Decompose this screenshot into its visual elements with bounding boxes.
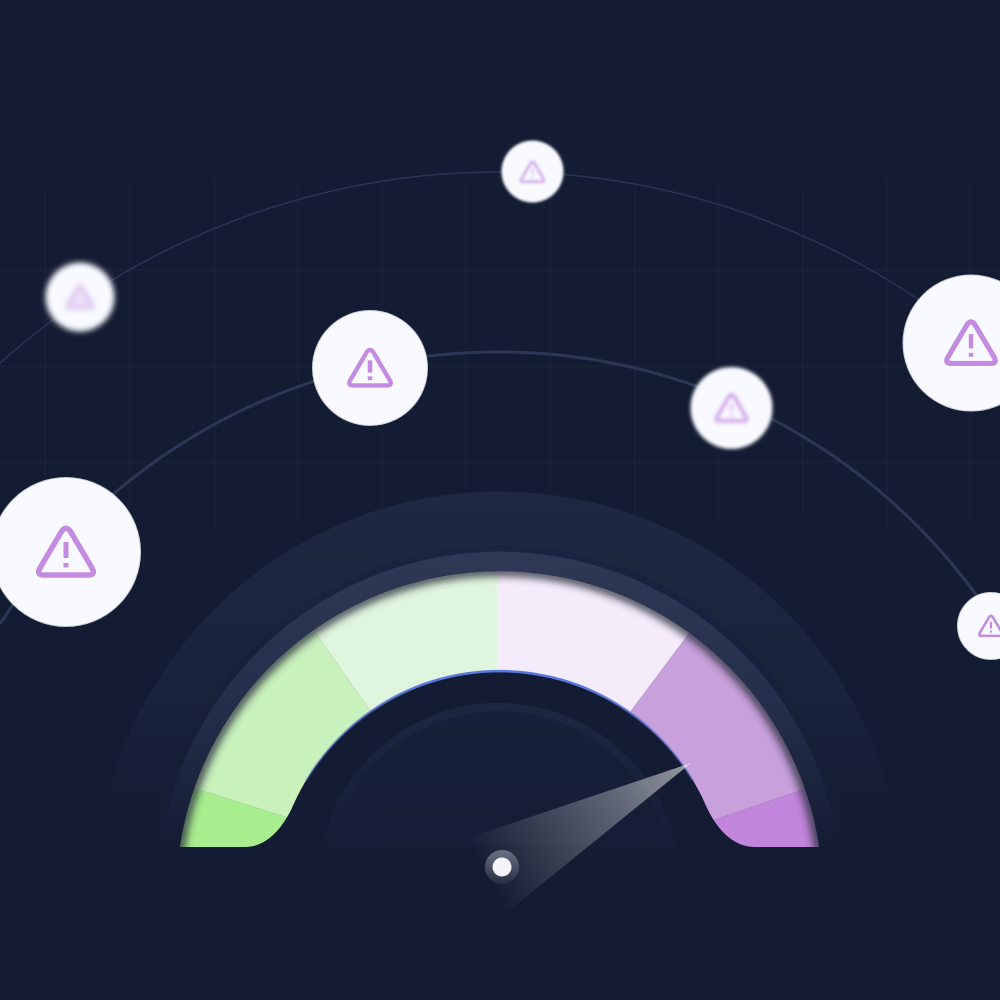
alert: small right edge: [958, 592, 1000, 660]
segment: mid green: [194, 630, 370, 818]
icon: warning triangle: [349, 350, 391, 385]
icon: warning triangle: [716, 395, 747, 421]
segment: pale green: [314, 571, 497, 712]
outer orbit arc: [0, 172, 1000, 363]
alert: right blurred: [690, 367, 772, 449]
blue inner edge of band: [306, 671, 693, 781]
icon: warning triangle: [39, 528, 93, 575]
alert: large right: [903, 275, 1000, 411]
segment: mid purple: [630, 633, 805, 820]
gauge outer ring: [154, 545, 845, 847]
segment: bright purple: [714, 789, 819, 847]
needle hub: [485, 850, 519, 884]
alert: large left: [0, 478, 140, 626]
icon: warning triangle: [521, 162, 544, 182]
background grid: [44, 270, 970, 462]
band inner shadow: [180, 571, 819, 847]
icon: warning triangle: [947, 322, 995, 363]
alert: centre left: [312, 310, 428, 426]
segment: pale purple: [497, 571, 690, 712]
alert: left blurred: [46, 262, 114, 332]
alert: top blurred: [502, 140, 564, 202]
gauge halo: [99, 491, 899, 847]
needle: [462, 763, 691, 914]
inner dial: [322, 703, 676, 847]
inner orbit arc: [0, 352, 1000, 630]
segment: bright green: [180, 788, 287, 847]
gauge inner backing: [180, 571, 819, 847]
icon: warning triangle: [979, 616, 1000, 636]
icon: warning triangle: [67, 286, 93, 308]
gauge coloured band: [180, 571, 819, 847]
